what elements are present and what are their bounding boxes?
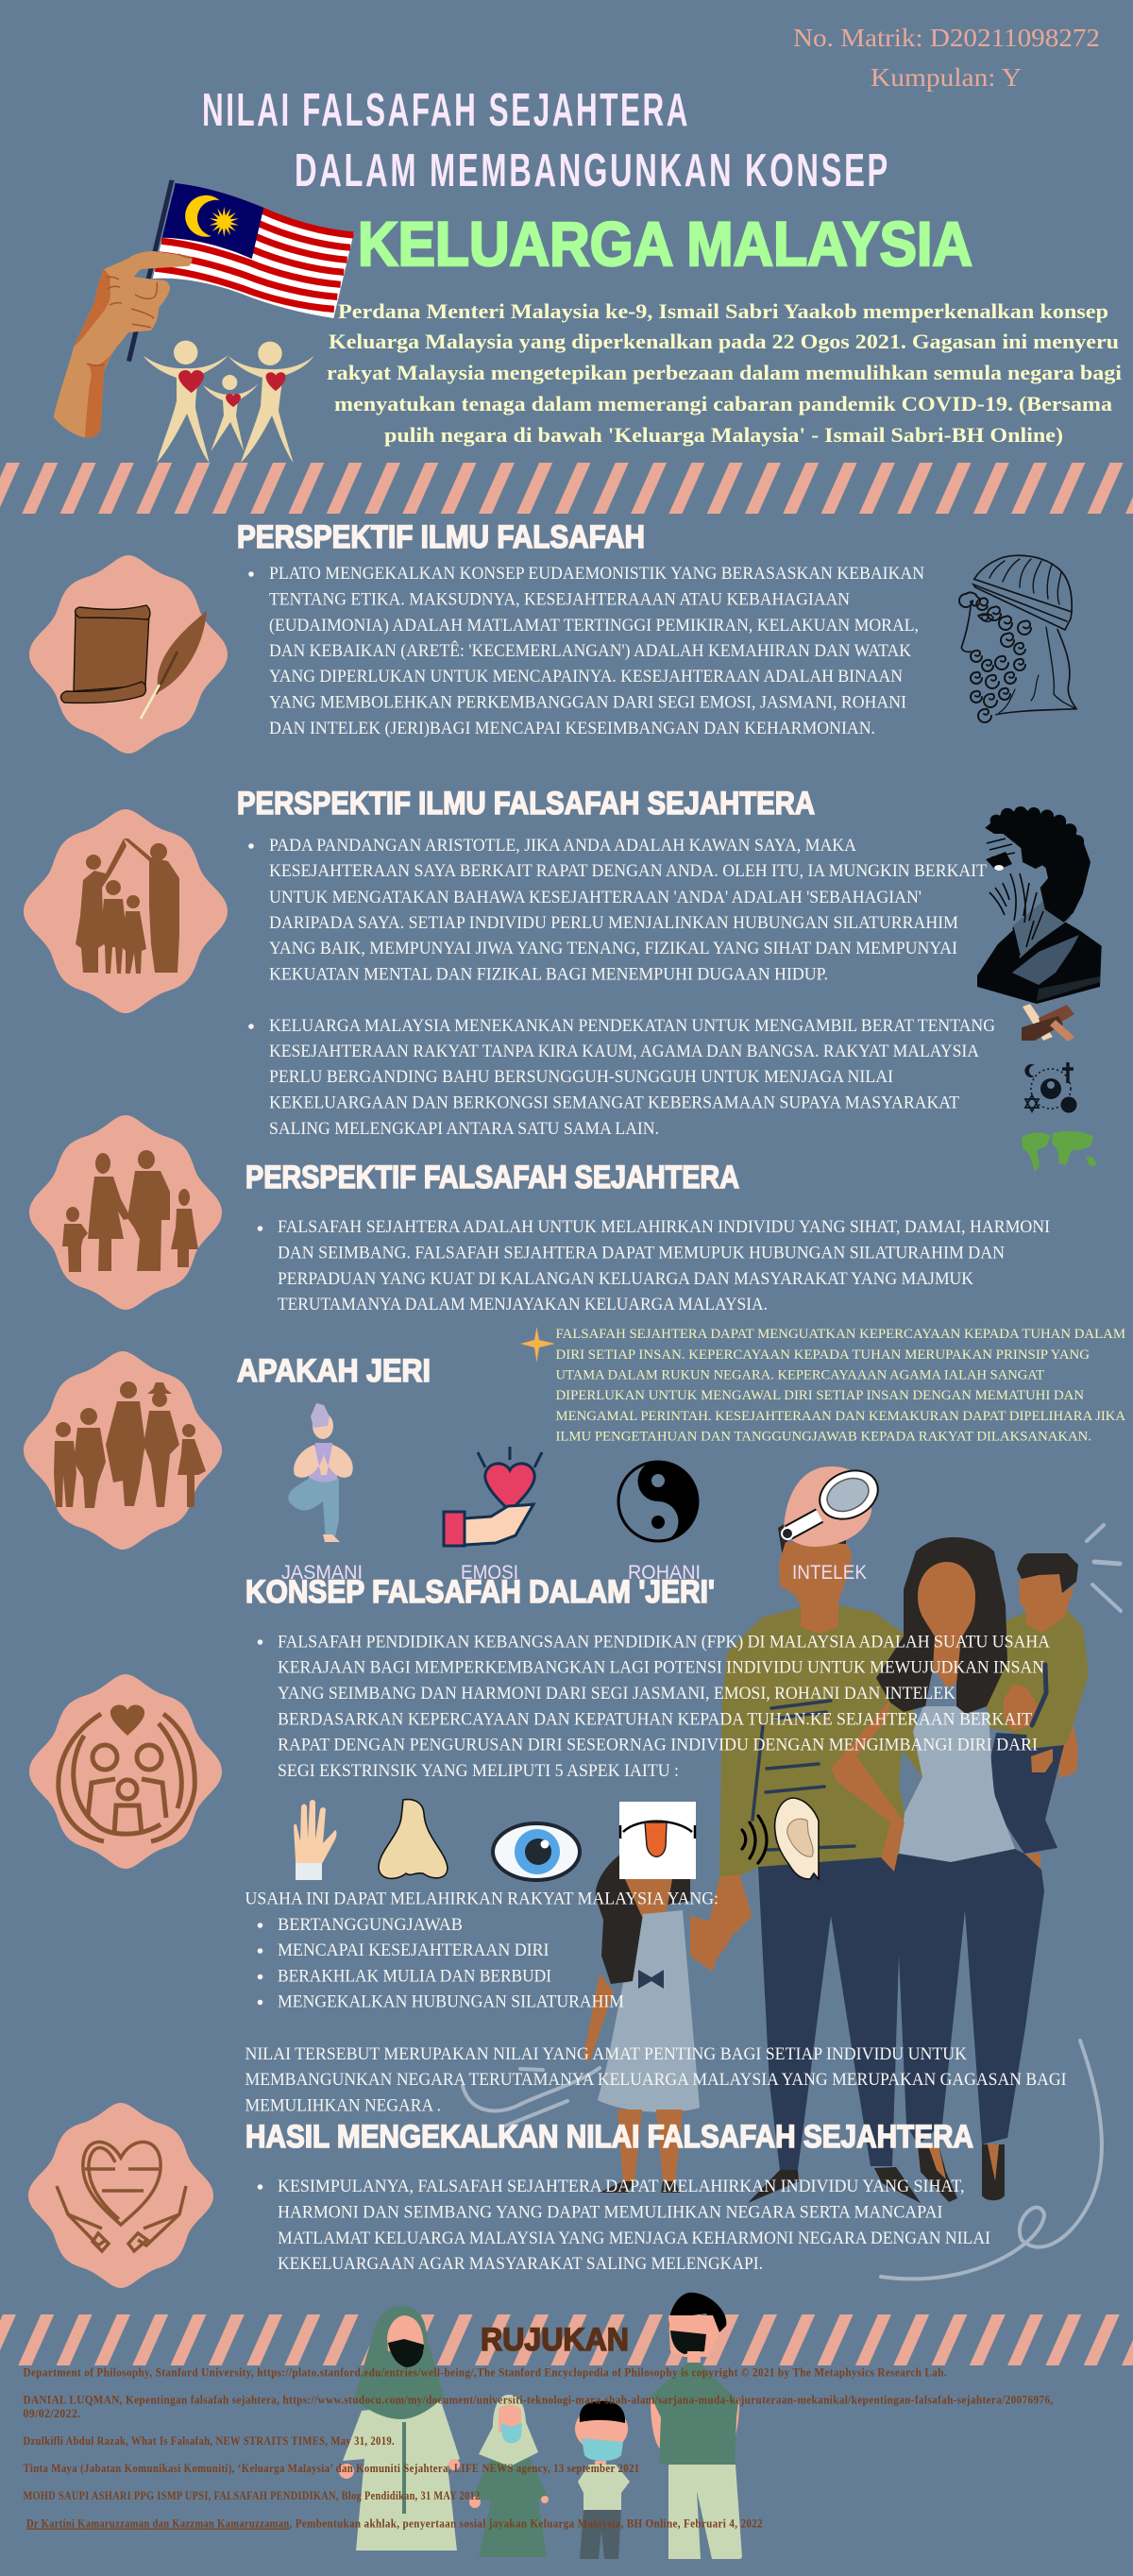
- icon: hand sense: [294, 1800, 336, 1880]
- intro paragraph: rakyat Malaysia mengetepikan perbezaan dalam memulihkan semula negara bagi: [327, 361, 1122, 384]
- icon: eye sense: [493, 1823, 580, 1880]
- heading: HASIL MENGEKALKAN NILAI FALSAFAH SEJAHTERA: [245, 2119, 973, 2155]
- blob panel 2 with family under roof: [24, 809, 228, 1013]
- section: hasil mengekalkan nilai: [245, 2119, 990, 2274]
- woman: [831, 1537, 1044, 2202]
- icon: cream family with hearts: [144, 341, 314, 463]
- section: perspektif ilmu falsafah: TENTANG ETIKA. MAKSUDNYA, KESEJAHTERAAAN ATAU KEBAHAGIAAN: [269, 589, 850, 610]
- illustration: masked family: [339, 2293, 742, 2559]
- callout: yellow text: UTAMA DALAM RUKUN NEGARA. KEPERCAYAAAN AGAMA IALAH SANGAT: [555, 1367, 1044, 1382]
- section: perspektif falsafah sejahtera: [245, 1160, 1050, 1314]
- section: hasil mengekalkan nilai: HARMONI DAN SEIMBANG YANG DAPAT MEMULIHKAN NEGARA SERTA MANCAPAI: [278, 2202, 942, 2223]
- callout: yellow text: [555, 1327, 1126, 1445]
- section: konsep falsafah dalam jeri: [245, 1574, 1050, 1781]
- intro paragraph: pulih negara di bawah 'Keluarga Malaysia' - Ismail Sabri-BH Online): [384, 423, 1063, 447]
- girl: [583, 1851, 752, 2193]
- section: perspektif ilmu falsafah: YANG MEMBOLEHKAN PERKEMBANGGAN DARI SEGI EMOSI, JASMANI, ROHANI: [269, 693, 906, 712]
- text block: usaha ini: MENCAPAI KESEJAHTERAAN DIRI: [278, 1940, 550, 1960]
- icon: religions circle: [1024, 1062, 1076, 1112]
- stripe band: top: [0, 463, 1133, 514]
- section: perspektif ilmu falsafah: (EUDAIMONIA) ADALAH MATLAMAT TERTINGGI PEMIKIRAN, KELAKUAN MORAL,: [269, 616, 919, 636]
- title: [202, 85, 972, 279]
- son: [575, 2401, 630, 2559]
- matric number and group: Kumpulan: Y: [871, 63, 1022, 92]
- section: hasil mengekalkan nilai: MATLAMAT KELUARGA MALAYSIA YANG MENJAGA KEHARMONI NEGARA DENGAN NILAI: [278, 2229, 990, 2248]
- icon: jasmani yoga figure: [288, 1403, 353, 1542]
- section: perspektif ilmu falsafah sejahtera: PERLU BERGANDING BAHU BERSUNGGUH-SUNGGUH UNTUK MENJAGA NILAI: [269, 1067, 893, 1087]
- intro paragraph: Perdana Menteri Malaysia ke-9, Ismail Sabri Yaakob memperkenalkan konsep: [338, 299, 1108, 323]
- section: konsep falsafah dalam jeri: FALSAFAH PENDIDIKAN KEBANGSAAN PENDIDIKAN (FPK) DI MALAYSIA ADALAH SUATU USAHA: [278, 1632, 1050, 1652]
- blob panel 4 with family of five: [24, 1351, 222, 1550]
- section: perspektif falsafah sejahtera: TERUTAMANYA DALAM MENJAYAKAN KELUARGA MALAYSIA.: [278, 1295, 768, 1314]
- section: perspektif falsafah sejahtera: FALSAFAH SEJAHTERA ADALAH UNTUK MELAHIRKAN INDIVIDU YANG SIHAT, DAMAI, HARMONI: [278, 1217, 1050, 1237]
- section: perspektif ilmu falsafah sejahtera: DARIPADA SAYA. SETIAP INDIVIDU PERLU MENJALINKAN HUBUNGAN SILATURRAHIM: [269, 913, 958, 933]
- daughter: [469, 2395, 549, 2557]
- heading: PERSPEKTIF FALSAFAH SEJAHTERA: [245, 1160, 739, 1195]
- section: perspektif falsafah sejahtera: PERPADUAN YANG KUAT DI KALANGAN KELUARGA DAN MASYARAKAT YANG MAJMUK: [278, 1269, 973, 1289]
- heading: KONSEP FALSAFAH DALAM 'JERI': [245, 1574, 715, 1610]
- icon: joined hands: [1022, 1004, 1074, 1042]
- section: perspektif ilmu falsafah: YANG DIPERLUKAN UNTUK MENCAPAINYA. KESEJAHTERAAN ADALAH BINAAN: [269, 667, 903, 686]
- mother: [339, 2306, 460, 2551]
- section: perspektif ilmu falsafah sejahtera: SALING MELENGKAPI ANTARA SATU SAMA LAIN.: [269, 1119, 659, 1139]
- blob panel 1 with scroll and quill: [29, 555, 228, 754]
- icon: nose sense: [379, 1800, 448, 1878]
- references: , Pembentukan akhlak, penyertaan sosial jayakan Keluarga Malaysia, BH Online, Februari 4, 2022: [289, 2516, 763, 2531]
- section: perspektif ilmu falsafah sejahtera: YANG BAIK, MEMPUNYAI JIWA YANG TENANG, FIZIKAL YANG SIHAT DAN MEMPUNYAI: [269, 939, 957, 958]
- jeri labels: [281, 1562, 867, 1584]
- references: [23, 2364, 1054, 2531]
- man: [708, 1522, 922, 2203]
- stripe band: bottom: [0, 2314, 1133, 2365]
- heading: PERSPEKTIF ILMU FALSAFAH: [237, 519, 645, 555]
- intro paragraph: [327, 299, 1122, 447]
- section: konsep falsafah dalam jeri: YANG SEIMBANG DAN HARMONI DARI SEGI JASMANI, EMOSI, ROHANI DAN INTELEK: [278, 1684, 955, 1703]
- icon: intelek head and magnifier: [782, 1462, 886, 1547]
- section: perspektif ilmu falsafah sejahtera: KESEJAHTERAAN RAKYAT TANPA KIRA KAUM, AGAMA DAN BANGSA. RAKYAT MALAYSIA: [269, 1042, 979, 1061]
- text block: usaha ini: MENGEKALKAN HUBUNGAN SILATURAHIM: [278, 1992, 624, 2011]
- text block: usaha ini: BERAKHLAK MULIA DAN BERBUDI: [278, 1966, 551, 1987]
- callout: yellow text: FALSAFAH SEJAHTERA DAPAT MENGUATKAN KEPERCAYAAN KEPADA TUHAN DALAM: [555, 1327, 1125, 1342]
- references: Department of Philosophy, Stanford University, https://plato.stanford.edu/entries/well-being/,The Stanford Encyclopedia of Philosophy is copyright © 2021 by The Metaphysics Research Lab.: [23, 2364, 947, 2380]
- section: perspektif falsafah sejahtera: DAN SEIMBANG. FALSAFAH SEJAHTERA DAPAT MEMUPUK HUBUNGAN SILATURAHIM DAN: [278, 1243, 1005, 1263]
- text block: usaha ini: [245, 1889, 719, 2011]
- decorative swirl lines: [463, 1525, 1121, 2279]
- section: hasil mengekalkan nilai: KESIMPULANYA, FALSAFAH SEJAHTERA DAPAT MELAHIRKAN INDIVIDU YANG SIHAT,: [278, 2177, 965, 2196]
- boy: [987, 1553, 1089, 1874]
- icon: tongue sense: [619, 1802, 696, 1879]
- callout: yellow text: MENGAMAL PERINTAH. KESEJAHTERAAN DAN KEMAKURAN DAPAT DIPELIHARA JIKA: [555, 1409, 1126, 1424]
- icon: ear sense: [742, 1798, 819, 1879]
- callout: yellow text: ILMU PENGETAHUAN DAN TANGGUNGJAWAB KEPADA RAKYAT DILAKSANAKAN.: [555, 1430, 1091, 1445]
- section: perspektif ilmu falsafah sejahtera: KELUARGA MALAYSIA MENEKANKAN PENDEKATAN UNTUK MENGAMBIL BERAT TENTANG: [269, 1016, 995, 1036]
- section: perspektif ilmu falsafah sejahtera: KESEJAHTERAAN SAYA BERKAIT RAPAT DENGAN ANDA. OLEH ITU, IA MUNGKIN BERKAIT: [269, 861, 987, 881]
- text block: nilai tersebut: MEMBANGUNKAN NEGARA TERUTAMANYA KELUARGA MALAYSIA YANG MERUPAKAN GAGASAN BAGI: [245, 2070, 1067, 2090]
- callout: yellow text: DIRI SETIAP INSAN. KEPERCAYAAN KEPADA TUHAN MERUPAKAN PRINSIP YANG: [555, 1347, 1091, 1363]
- intro paragraph: Keluarga Malaysia yang diperkenalkan pada 22 Ogos 2021. Gagasan ini menyeru: [329, 330, 1119, 353]
- heading: PERSPEKTIF ILMU FALSAFAH SEJAHTERA: [237, 786, 815, 822]
- jeri labels: JASMANI: [281, 1562, 363, 1584]
- text block: nilai tersebut: MEMULIHKAN NEGARA .: [245, 2096, 441, 2115]
- text block: usaha ini: USAHA INI DAPAT MELAHIRKAN RAKYAT MALAYSIA YANG:: [245, 1889, 719, 1909]
- section: perspektif ilmu falsafah: PLATO MENGEKALKAN KONSEP EUDAEMONISTIK YANG BERASASKAN KEBAIKAN: [269, 564, 924, 584]
- illustration: large family behind text: [463, 1522, 1121, 2279]
- title: KELUARGA MALAYSIA: [358, 209, 972, 279]
- matric number and group: No. Matrik: D20211098272: [793, 24, 1100, 52]
- icon: hand holding flag: [54, 179, 354, 437]
- section: konsep falsafah dalam jeri: RAPAT DENGAN PENGURUSAN DIRI SESEORNAG INDIVIDU DENGAN MENGIMBANGI DIRI DARI: [278, 1736, 1038, 1754]
- blob panel 5 with family circle icon: [29, 1674, 222, 1869]
- icon: rohani yin yang: [618, 1461, 699, 1542]
- blob panel 3 with family of four: [29, 1115, 222, 1310]
- section: perspektif ilmu falsafah sejahtera: UNTUK MENGATAKAN BAHAWA KESEJAHTERAAN 'ANDA' ADALAH 'SEBAHAGIAN': [269, 888, 922, 907]
- blob panel 6 with heart and hands: [28, 2103, 213, 2288]
- section: perspektif ilmu falsafah sejahtera: PADA PANDANGAN ARISTOTLE, JIKA ANDA ADALAH KAWAN SAYA, MAKA: [269, 836, 856, 856]
- references: Dzulkifli Abdul Razak, What Is Falsafah, NEW STRAITS TIMES, May 31, 2019.: [23, 2433, 395, 2448]
- section: perspektif ilmu falsafah sejahtera: [237, 786, 995, 1139]
- references: 09/02/2022.: [23, 2406, 81, 2420]
- icon: emosi heart in hand: [444, 1447, 542, 1546]
- section: perspektif ilmu falsafah: DAN KEBAIKAN (ARETÊ: 'KECEMERLANGAN') ADALAH KEMAHIRAN DAN WATAK: [269, 640, 911, 661]
- references: Dr Kartini Kamaruzzaman dan Kazzman Kamaruzzaman: [26, 2516, 290, 2531]
- section: perspektif ilmu falsafah sejahtera: KEKELUARGAAN DAN BERKONGSI SEMANGAT KEBERSAMAAN SUPAYA MASYARAKAT: [269, 1093, 959, 1112]
- text block: nilai tersebut: [245, 2044, 1067, 2115]
- section: konsep falsafah dalam jeri: SEGI EKSTRINSIK YANG MELIPUTI 5 ASPEK IAITU :: [278, 1761, 679, 1781]
- text block: nilai tersebut: NILAI TERSEBUT MERUPAKAN NILAI YANG AMAT PENTING BAGI SETIAP INDIVIDU UNTUK: [245, 2044, 967, 2064]
- text block: usaha ini: BERTANGGUNGJAWAB: [278, 1915, 463, 1935]
- jeri labels: EMOSI: [461, 1562, 518, 1584]
- intro paragraph: menyatukan tenaga dalam memerangi cabaran pandemik COVID-19. (Bersama: [334, 392, 1112, 415]
- heading: apakah jeri: APAKAH JERI: [237, 1353, 431, 1389]
- matric number and group: [793, 24, 1100, 92]
- references: Tinta Maya (Jabatan Komunikasi Komuniti), ‘Keluarga Malaysia’ dan Komuniti Sejahtera, LIFE NEWS agency, 13 september 2021: [23, 2461, 640, 2475]
- icon: world map: [1022, 1131, 1097, 1172]
- references: MOHD SAUPI ASHARI PPG ISMP UPSI, FALSAFAH PENDIDIKAN, Blog Pendidikan, 31 MAY 2012: [23, 2488, 481, 2502]
- section: konsep falsafah dalam jeri: KERAJAAN BAGI MEMPERKEMBANGKAN LAGI POTENSI INDIVIDU UNTUK MEWUJUDKAN INSAN: [278, 1658, 1044, 1677]
- section: perspektif ilmu falsafah sejahtera: KEKUATAN MENTAL DAN FIZIKAL BAGI MENEMPUHI DUGAAN HIDUP.: [269, 965, 828, 984]
- jeri labels: INTELEK: [792, 1562, 867, 1584]
- icon: Plato head: [959, 555, 1076, 722]
- heading: rujukan: RUJUKAN: [481, 2322, 629, 2358]
- father: [651, 2293, 742, 2559]
- callout: yellow text: DIPERLUKAN UNTUK MENGAWAL DIRI SETIAP INSAN DENGAN MEMATUHI DAN: [555, 1388, 1085, 1403]
- jeri labels: ROHANI: [628, 1562, 701, 1584]
- icon: Aristotle bust: [970, 806, 1102, 1004]
- section: perspektif ilmu falsafah: DAN INTELEK (JERI)BAGI MENCAPAI KESEIMBANGAN DAN KEHARMONIAN.: [269, 719, 875, 738]
- title: NILAI FALSAFAH SEJAHTERA: [202, 85, 690, 136]
- section: konsep falsafah dalam jeri: BERDASARKAN KEPERCAYAAN DAN KEPATUHAN KEPADA TUHAN.KE SEJAHTERAAN BERKAIT: [278, 1709, 1032, 1730]
- section: hasil mengekalkan nilai: KEKELUARGAAN AGAR MASYARAKAT SALING MELENGKAPI.: [278, 2254, 763, 2274]
- icon: gold star: [520, 1327, 555, 1363]
- section: perspektif ilmu falsafah: [237, 519, 924, 738]
